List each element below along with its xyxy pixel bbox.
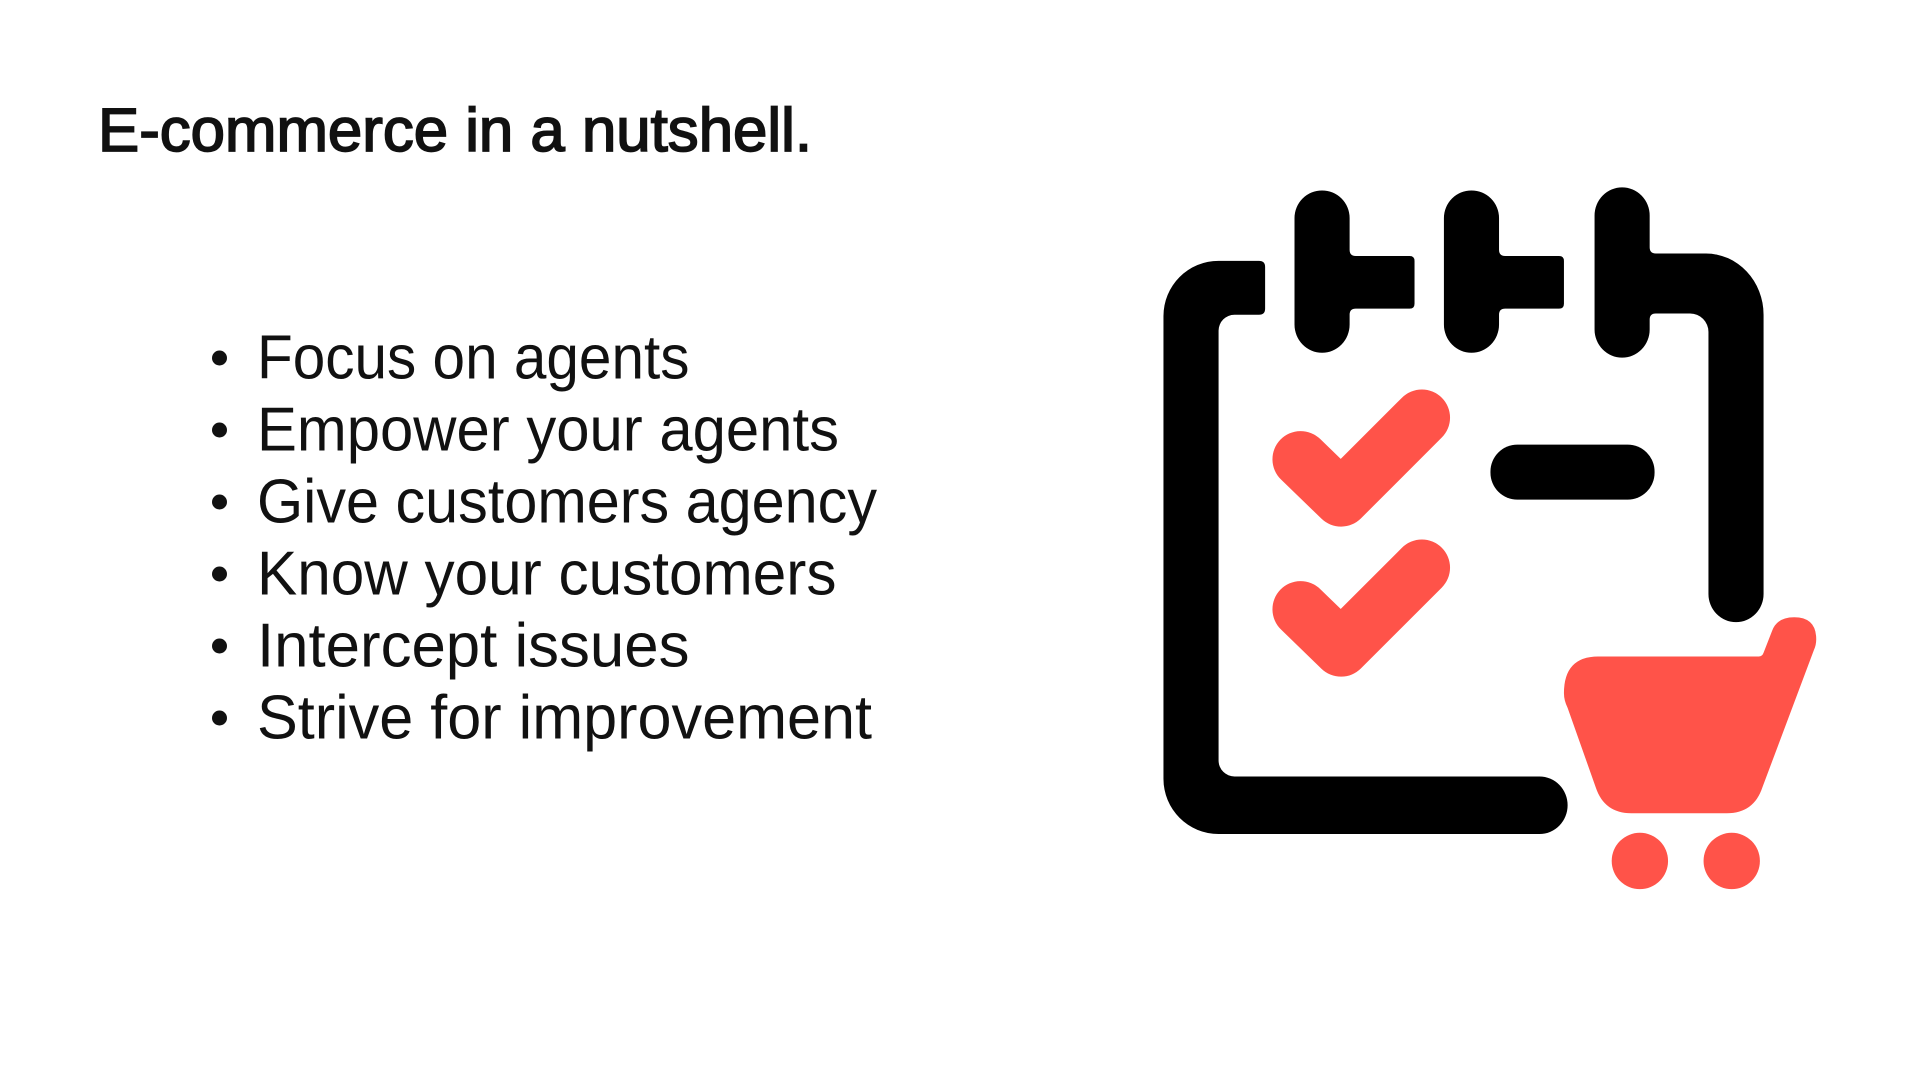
bullet: Give customers agency: Give customers agency bbox=[257, 468, 877, 536]
icon: minus line bbox=[1490, 445, 1655, 500]
bullet: Strive for improvement: Strive for improvement bbox=[257, 684, 872, 752]
icon: calendar board frame left bbox=[1163, 261, 1568, 834]
icon: binder pin 3 and board frame right bbox=[1595, 187, 1764, 622]
icon: check mark 2 bbox=[1301, 568, 1422, 648]
icon: check mark 1 bbox=[1301, 418, 1422, 498]
bullet: Know your customers: Know your customers bbox=[257, 540, 836, 608]
bullet: Focus on agents: Focus on agents bbox=[257, 324, 690, 392]
icon: cart wheel right bbox=[1704, 833, 1760, 889]
title: E-commerce in a nutshell. bbox=[98, 96, 812, 164]
bullet: Empower your agents: Empower your agents bbox=[257, 396, 839, 464]
icon: calendar checklist with shopping cart bbox=[1163, 187, 1816, 889]
icon: binder pin 2 bbox=[1444, 190, 1564, 353]
bullet list bbox=[212, 324, 877, 752]
icon: cart basket bbox=[1564, 617, 1816, 813]
bullet: Intercept issues: Intercept issues bbox=[257, 612, 690, 680]
icon: cart wheel left bbox=[1612, 833, 1668, 889]
icon: binder pin 1 bbox=[1295, 190, 1415, 353]
